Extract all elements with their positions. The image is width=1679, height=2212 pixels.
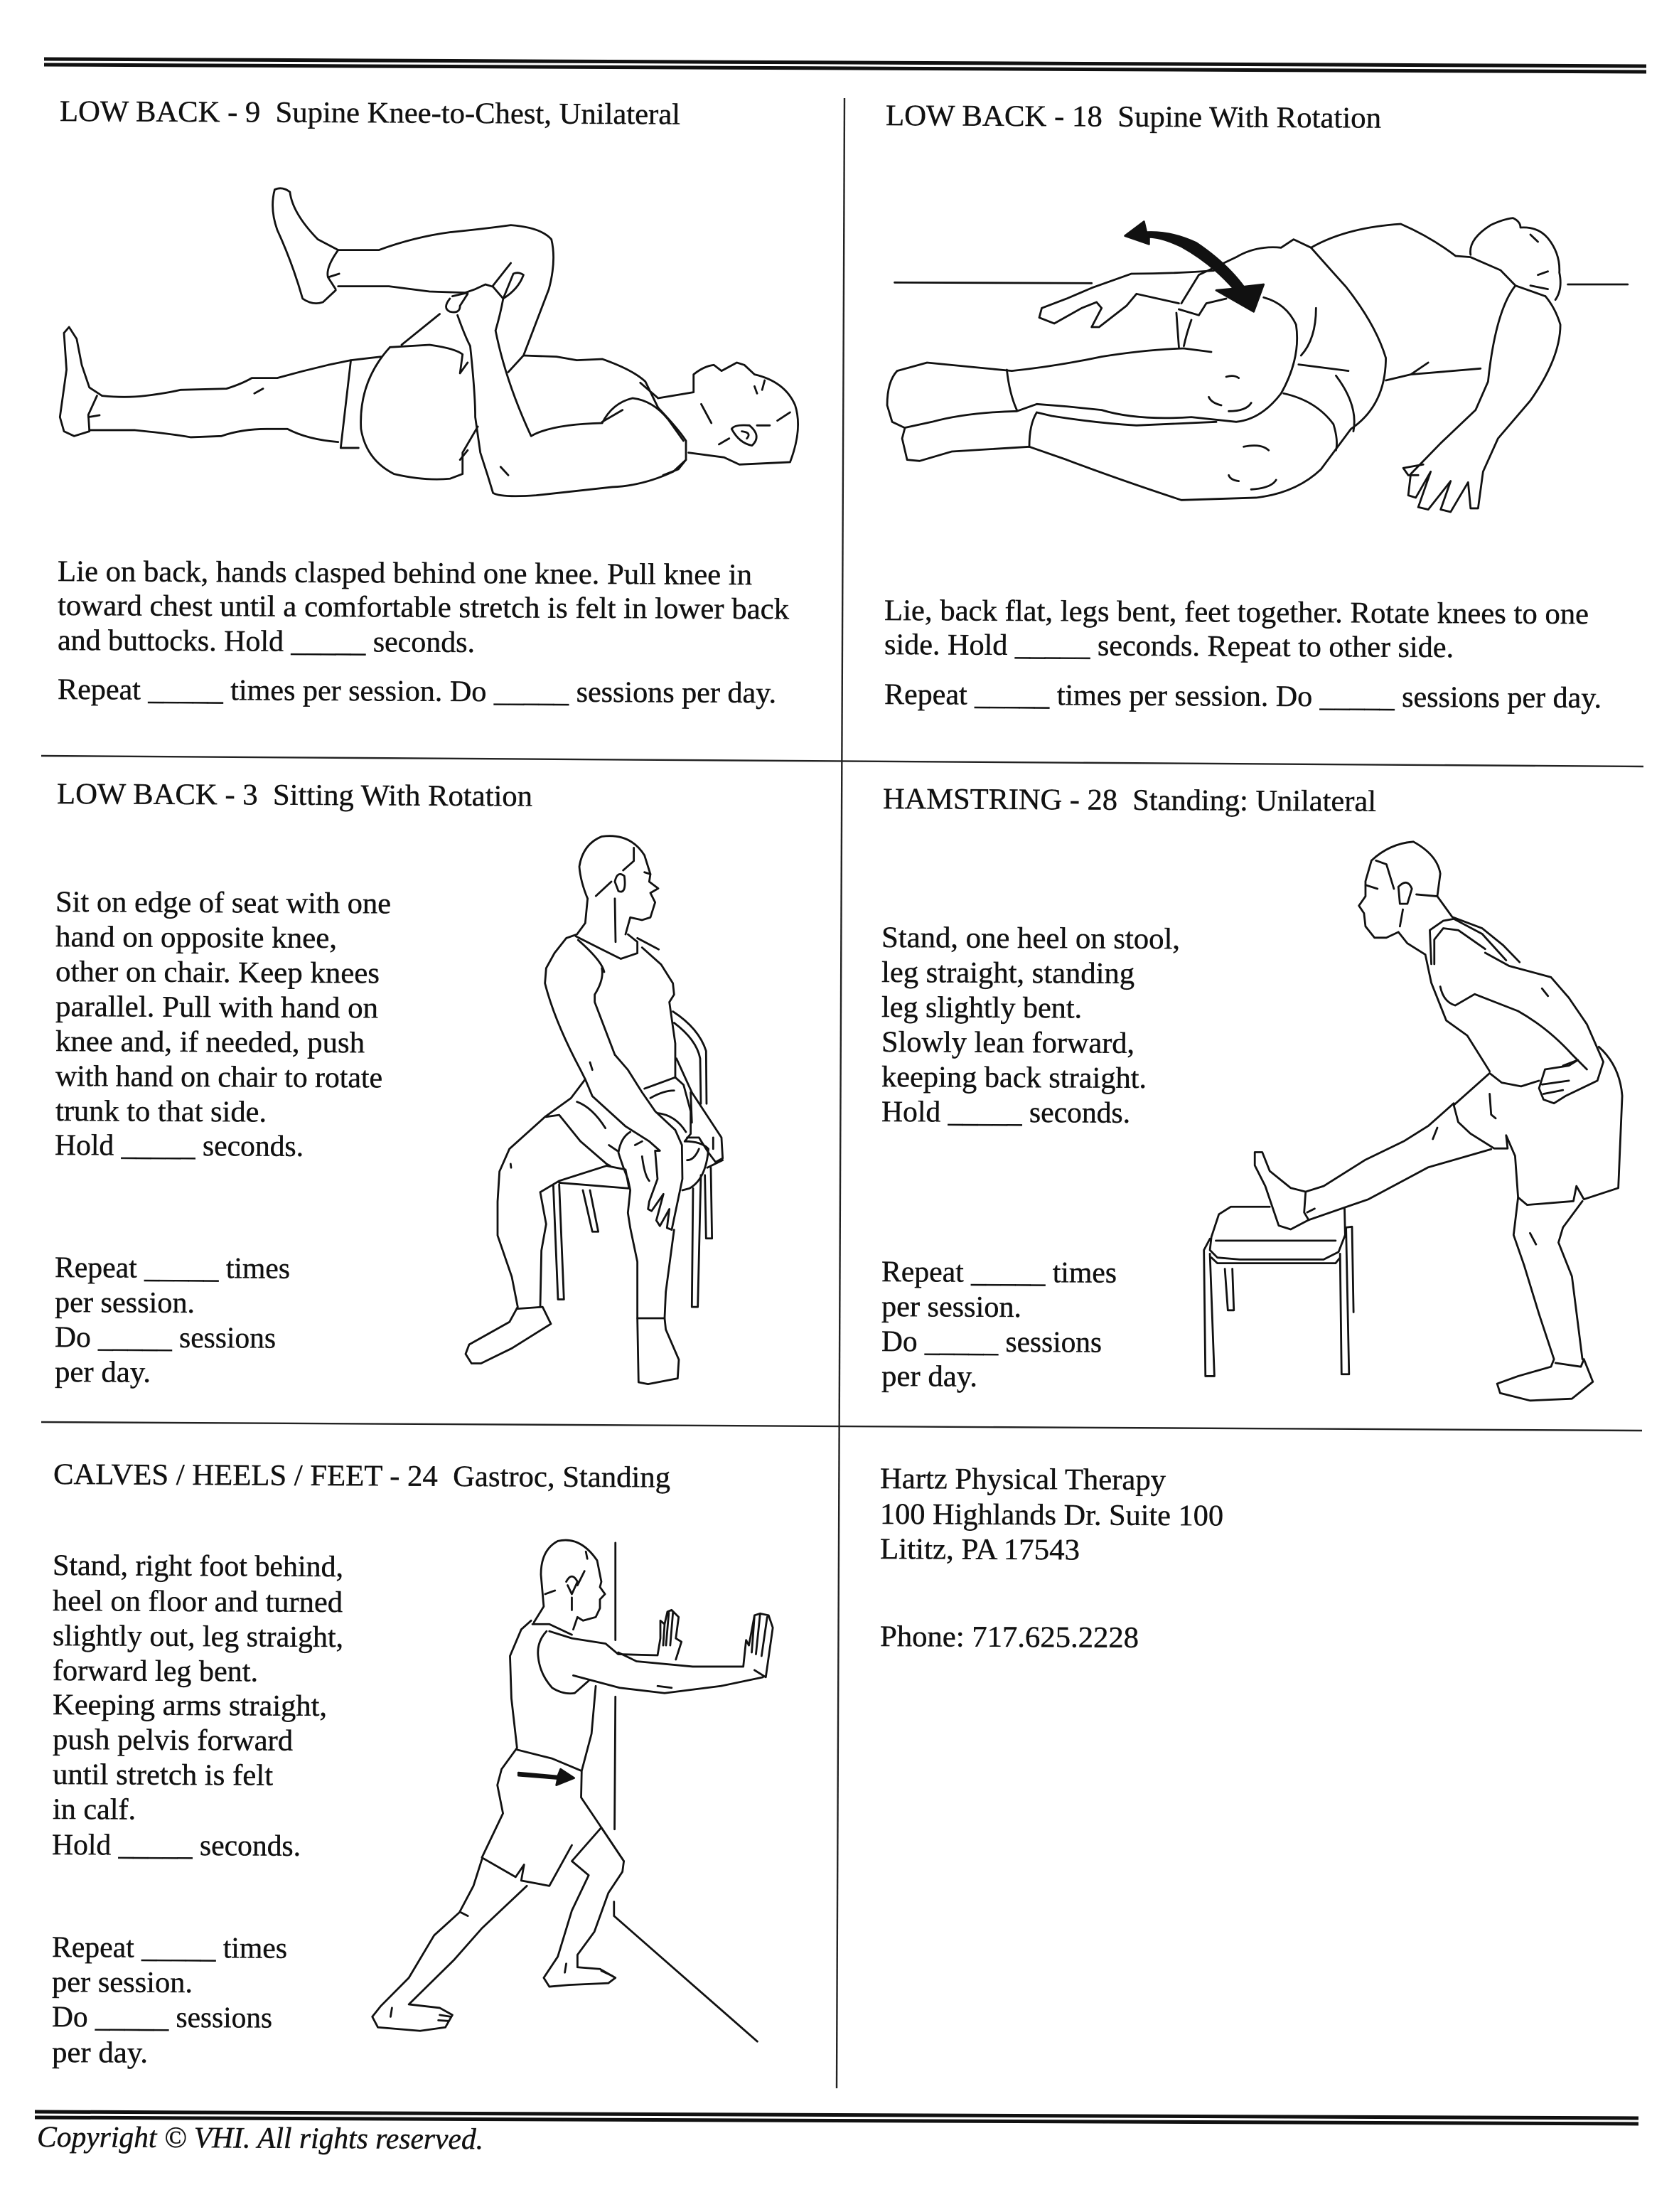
heading: Hamstring 28: HAMSTRING - 28 Standing: Unilateral	[883, 783, 1376, 818]
instructions: Hamstring hold: leg straight, standing	[881, 956, 1134, 990]
clinic address: Hartz Physical Therapy	[880, 1463, 1166, 1497]
instructions: Low Back 3 hold: with hand on chair to rotate	[55, 1060, 382, 1094]
instructions: Low Back 3 hold: Hold _____ seconds.	[55, 1129, 304, 1163]
instructions: Low Back 9: Repeat _____ times per session. Do _____ sessions per day.	[58, 673, 776, 710]
instructions: Calves hold: Hold _____ seconds.	[52, 1829, 301, 1863]
instructions: Calves hold: heel on floor and turned	[53, 1585, 343, 1619]
instructions: Low Back 18: Lie, back flat, legs bent, feet together. Rotate knees to one	[884, 594, 1589, 631]
instructions: Low Back 9: Lie on back, hands clasped behind one knee. Pull knee in	[58, 555, 752, 592]
instructions: Hamstring hold	[881, 921, 1180, 1130]
bottom double rule	[35, 2112, 1638, 2124]
instructions: Low Back 3 hold: hand on opposite knee,	[55, 921, 337, 955]
heading: Low Back 9: LOW BACK - 9 Supine Knee-to-Chest, Unilateral	[60, 95, 680, 132]
illustration: seated rotation on chair	[466, 836, 723, 1384]
instructions: Low Back 3 repeat: Do _____ sessions	[55, 1321, 276, 1355]
panel: Hamstring 28 Standing Unilateral	[881, 783, 1622, 1401]
instructions: Low Back 3 hold: Sit on edge of seat with one	[55, 886, 391, 920]
instructions: Calves hold: until stretch is felt	[53, 1758, 274, 1792]
instructions: Calves hold: Keeping arms straight,	[53, 1689, 327, 1723]
instructions: Low Back 3 hold: trunk to that side.	[55, 1095, 267, 1129]
instructions: Calves hold: slightly out, leg straight,	[53, 1620, 343, 1654]
instructions: Low Back 9: toward chest until a comfortable stretch is felt in lower back	[58, 589, 789, 626]
instructions: Low Back 3 hold: parallel. Pull with hand on	[55, 990, 378, 1025]
instructions: Low Back 18: Repeat _____ times per session. Do _____ sessions per day.	[884, 678, 1602, 715]
instructions: Low Back 18	[884, 594, 1602, 715]
instructions: Low Back 3 hold: other on chair. Keep knees	[55, 956, 380, 990]
panel: Low Back 9 Supine Knee-to-Chest	[58, 95, 798, 710]
heading: Low Back 3: LOW BACK - 3 Sitting With Rotation	[57, 778, 532, 813]
illustration: standing hamstring stretch on stool	[1204, 842, 1622, 1401]
instructions: Low Back 3 hold: knee and, if needed, push	[55, 1025, 365, 1059]
illustration: lying knee to chest	[60, 188, 798, 496]
clinic address: 100 Highlands Dr. Suite 100	[880, 1498, 1223, 1533]
instructions: Calves repeat: per session.	[52, 1966, 193, 1999]
instructions: Hamstring hold: Slowly lean forward,	[881, 1026, 1134, 1060]
clinic address	[880, 1463, 1223, 1566]
instructions: Calves repeat: per day.	[52, 2036, 148, 2070]
instructions: Low Back 3 repeat: Repeat _____ times	[55, 1251, 290, 1286]
instructions: Hamstring repeat	[881, 1256, 1117, 1394]
copyright notice: Copyright © VHI. All rights reserved.	[37, 2121, 483, 2156]
instructions: Hamstring hold: leg slightly bent.	[881, 991, 1082, 1025]
panel: Low Back 18 Supine With Rotation	[884, 100, 1628, 715]
instructions: Low Back 3 repeat: per day.	[55, 1356, 151, 1389]
panel: Calves Heels Feet 24 Gastroc Standing	[52, 1458, 773, 2070]
stool	[1204, 1207, 1353, 1376]
instructions: Hamstring hold: keeping back straight.	[881, 1061, 1147, 1095]
top double rule	[44, 59, 1646, 72]
panel: Low Back 3 Sitting With Rotation	[55, 778, 723, 1389]
instructions: Calves hold: Stand, right foot behind,	[53, 1549, 343, 1583]
illustration: standing gastroc wall push	[372, 1540, 773, 2041]
instructions: Calves hold: forward leg bent.	[53, 1655, 258, 1689]
instructions: Hamstring repeat: per session.	[881, 1291, 1021, 1324]
instructions: Hamstring repeat: per day.	[881, 1360, 977, 1394]
arrow: pelvis forward	[518, 1769, 574, 1785]
instructions: Calves hold: push pelvis forward	[53, 1724, 293, 1758]
instructions: Hamstring repeat: Do _____ sessions	[881, 1325, 1102, 1359]
instructions: Hamstring hold: Stand, one heel on stool,	[881, 921, 1180, 956]
clinic phone: Phone: 717.625.2228	[880, 1620, 1139, 1655]
instructions: Low Back 18: side. Hold _____ seconds. Repeat to other side.	[884, 629, 1454, 664]
arrow: rotation direction	[1125, 222, 1264, 311]
instructions: Hamstring repeat: Repeat _____ times	[881, 1256, 1117, 1290]
instructions: Low Back 9	[58, 555, 789, 710]
clinic address: Lititz, PA 17543	[880, 1533, 1080, 1566]
instructions: Low Back 3 repeat: per session.	[55, 1286, 195, 1320]
instructions: Calves hold	[52, 1549, 343, 1863]
instructions: Low Back 3 repeat	[55, 1251, 290, 1389]
instructions: Calves repeat: Repeat _____ times	[52, 1931, 287, 1965]
instructions: Calves hold: in calf.	[53, 1793, 136, 1827]
instructions: Calves repeat: Do _____ sessions	[52, 2001, 272, 2035]
instructions: Hamstring hold: Hold _____ seconds.	[881, 1096, 1130, 1130]
heading: Low Back 18: LOW BACK - 18 Supine With Rotation	[886, 100, 1381, 135]
panel: clinic contact	[880, 1463, 1223, 1655]
instructions: Low Back 9: and buttocks. Hold _____ seconds.	[58, 624, 475, 659]
heading: Calves 24: CALVES / HEELS / FEET - 24 Gastroc, Standing	[53, 1458, 670, 1495]
instructions: Low Back 3 hold	[55, 886, 391, 1163]
illustration: lying knee rotation	[887, 218, 1628, 512]
instructions: Calves repeat	[52, 1931, 287, 2070]
